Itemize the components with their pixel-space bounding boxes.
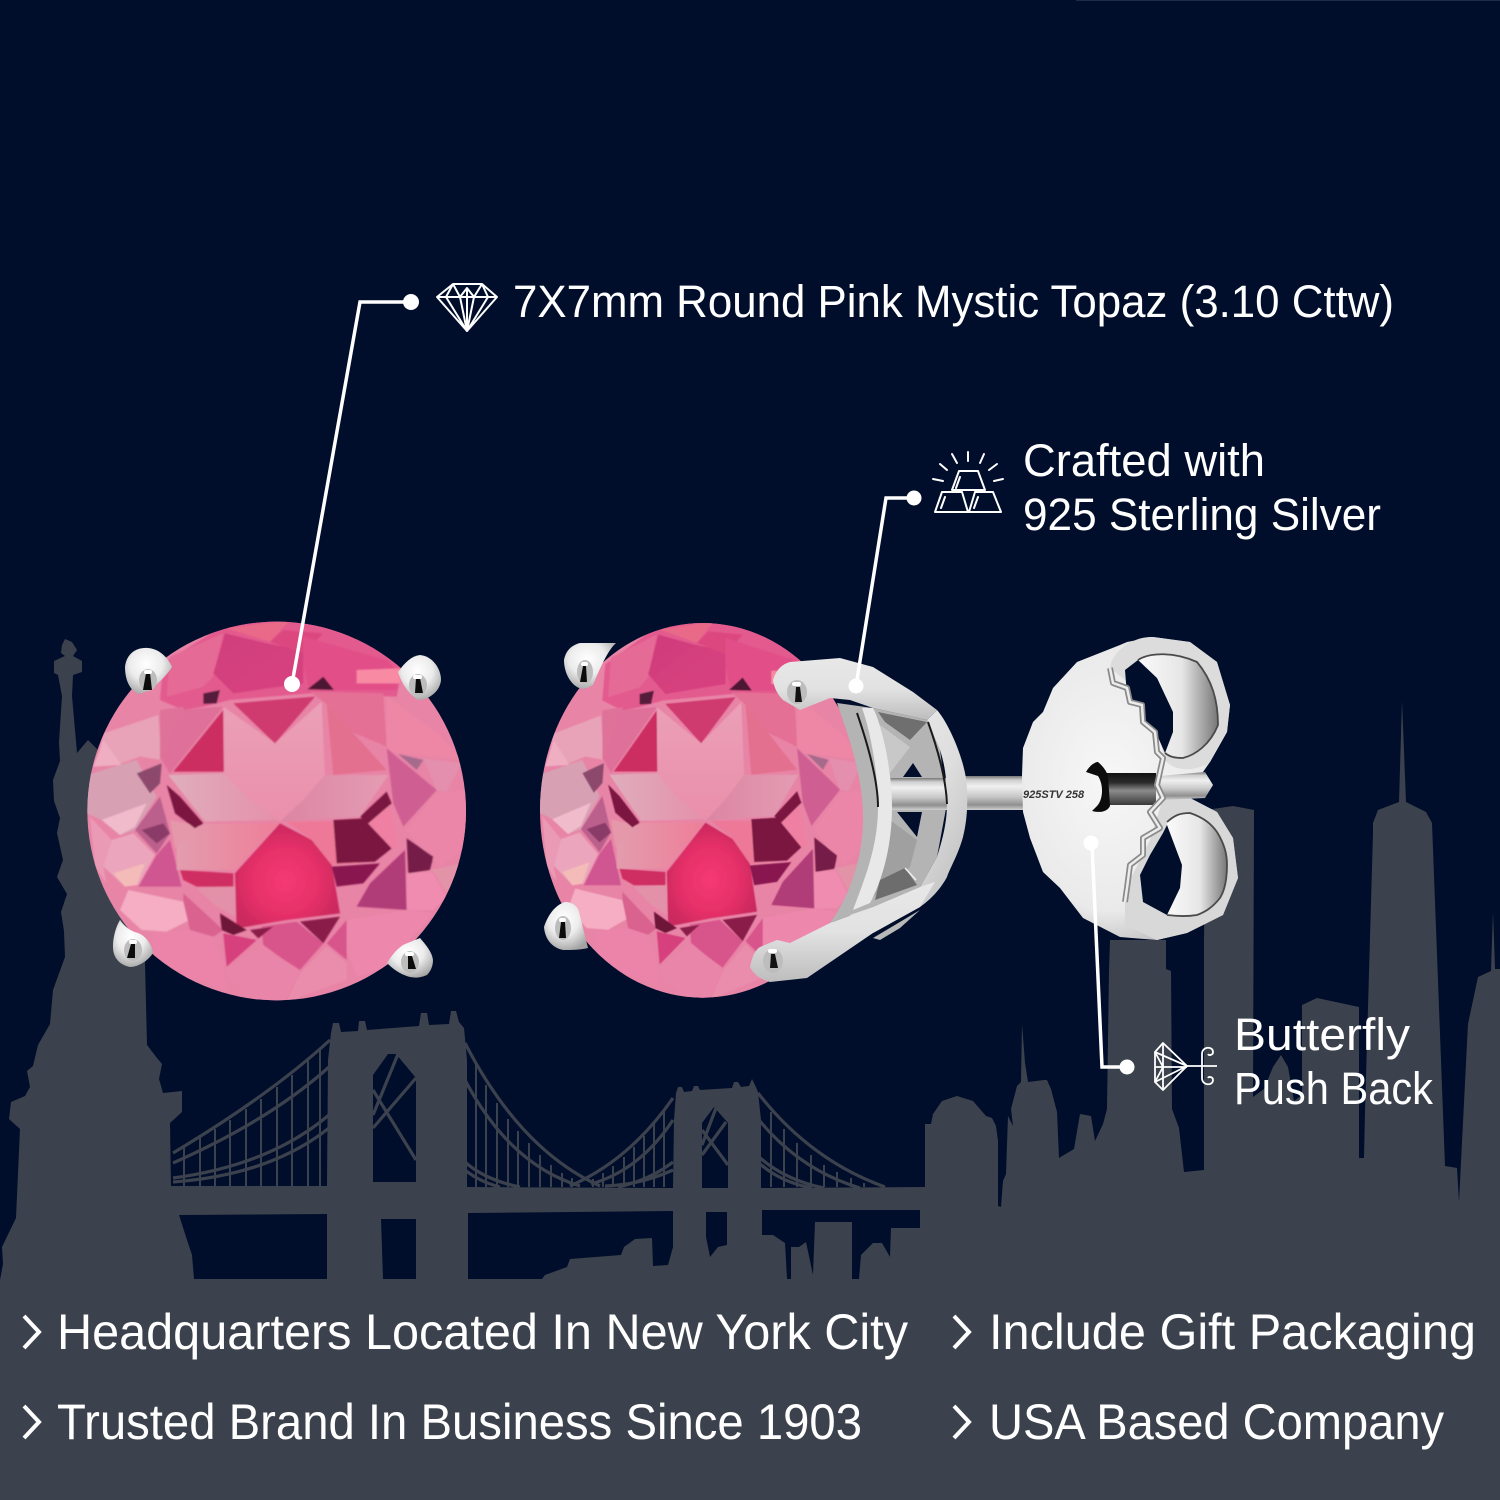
back prong bottom left [544,902,588,950]
label: push back: Butterfly [1234,1009,1411,1060]
New York skyline silhouette [0,639,1500,1500]
label: sterling silver: Crafted with [1023,435,1265,486]
bullet: trusted brand: Trusted Brand In Business Since 1903 [57,1394,862,1450]
prong top right [398,655,441,700]
icon: diamond [437,284,497,331]
earring side view: gem, basket setting, post and butterfly back [539,618,1238,1001]
leader line silver [848,490,922,694]
prong top left [125,648,172,694]
back prong top left [564,643,616,689]
setting bottom arm and prong [750,882,935,982]
post [960,776,1100,810]
prong bottom right [387,938,433,978]
bullet: gift packaging: Include Gift Packaging [989,1304,1476,1360]
setting top arm and prong [773,658,937,720]
label: gemstone: 7X7mm Round Pink Mystic Topaz (3.10 Cttw) [513,276,1394,327]
label: push back: Push Back [1234,1063,1433,1114]
label: sterling silver: 925 Sterling Silver [1023,489,1381,540]
prong bottom left [113,920,153,967]
basket outer rim [850,710,967,933]
upper ring and crescent [1110,637,1230,769]
callout: sterling silver [848,435,1381,694]
bullet: headquarters: Headquarters Located In New York City [57,1304,908,1360]
callout: gemstone [284,276,1394,692]
basket interior [830,703,949,923]
label: sterling silver [1023,435,1381,540]
serrated edge [1110,668,1163,902]
post dark section and collar [1104,773,1156,805]
bullet list: company facts [24,1304,1476,1450]
engraving: 925STV 258 [1023,789,1085,801]
callout: butterfly push back [1084,836,1433,1114]
gem facets front [87,617,467,1003]
lower ring and crescent [1125,798,1238,940]
bridge openings [179,1054,920,1279]
earring front view: round pink topaz with four prongs [87,617,467,1003]
bullet: usa based: USA Based Company [989,1394,1444,1450]
icon: silver bars [933,452,1003,512]
bridge lattice and cables [173,1040,885,1188]
back piece under arm [873,910,920,940]
butterfly back [1022,637,1238,940]
leader line gemstone [284,294,419,692]
icon: earring with push back [1155,1043,1217,1090]
label: push back [1234,1009,1433,1114]
leader line push back [1084,836,1134,1074]
gem facets side [539,618,866,1001]
basket inner band [853,708,892,910]
